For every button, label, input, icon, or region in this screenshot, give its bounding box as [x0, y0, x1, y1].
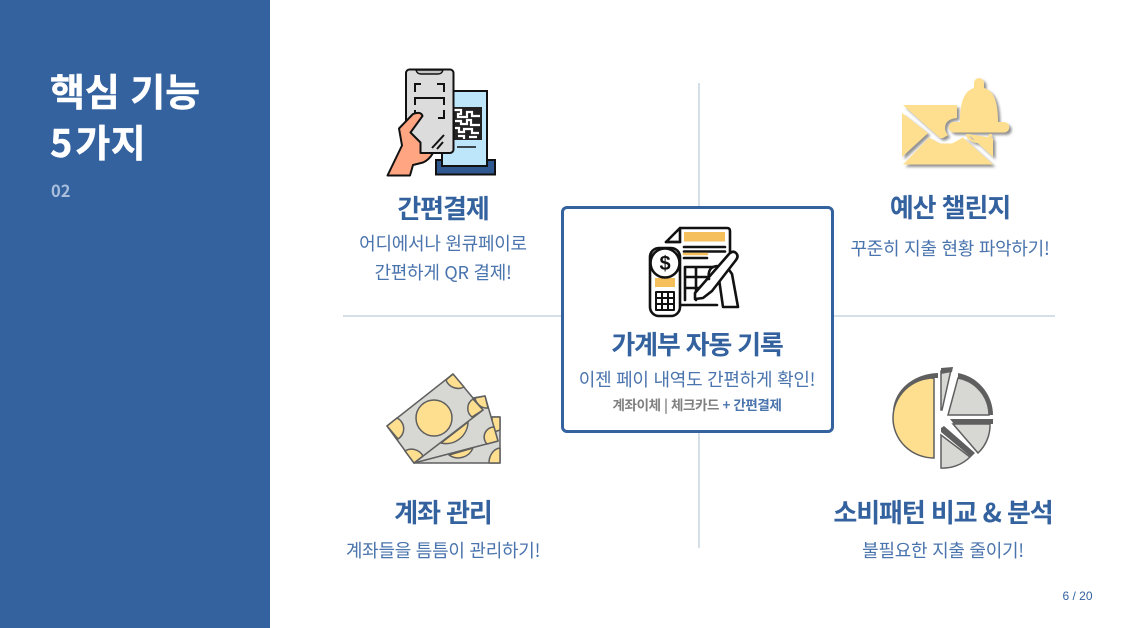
icon: envelope and bell: [902, 78, 1014, 168]
description: 간편하게 QR 결제!: [374, 259, 512, 285]
icon: ledger and calculator: $: [659, 253, 671, 275]
panel: center auto bookkeeping: [561, 206, 834, 433]
heading: 간편결제: [397, 189, 489, 226]
sub description: 계좌이체 | 체크카드 + 간편결제: [613, 394, 781, 414]
panel: spending pattern analysis: [833, 367, 1053, 563]
description: [359, 230, 527, 285]
panel: budget challenge: [850, 78, 1050, 261]
icon: ledger and calculator: [648, 226, 740, 318]
description: 계좌들을 틈틈이 관리하기!: [346, 537, 540, 563]
heading: 계좌 관리: [394, 493, 492, 530]
sidebar panel: [0, 0, 270, 628]
panel: account management: [346, 373, 540, 563]
page number: 6 / 20: [1062, 589, 1093, 603]
heading: 가계부 자동 기록: [611, 325, 783, 362]
panel: simple payment: [359, 68, 527, 285]
description: 꾸준히 지출 현황 파악하기!: [850, 235, 1050, 261]
description: 불필요한 지출 줄이기!: [862, 537, 1024, 563]
description: 어디에서나 원큐페이로: [359, 230, 527, 256]
icon: banknotes: [386, 373, 501, 464]
title: 5가지: [50, 113, 146, 168]
icon: QR phone payment: [386, 68, 496, 176]
section number: 02: [51, 178, 70, 202]
heading: 소비패턴 비교 & 분석: [833, 493, 1053, 530]
divider lines: [343, 315, 1055, 316]
heading: 예산 챌린지: [890, 188, 1010, 225]
description: 이젠 페이 내역도 간편하게 확인!: [579, 366, 815, 392]
title: [50, 62, 200, 168]
title: 핵심 기능: [50, 62, 200, 117]
icon: pie chart: [892, 367, 993, 469]
